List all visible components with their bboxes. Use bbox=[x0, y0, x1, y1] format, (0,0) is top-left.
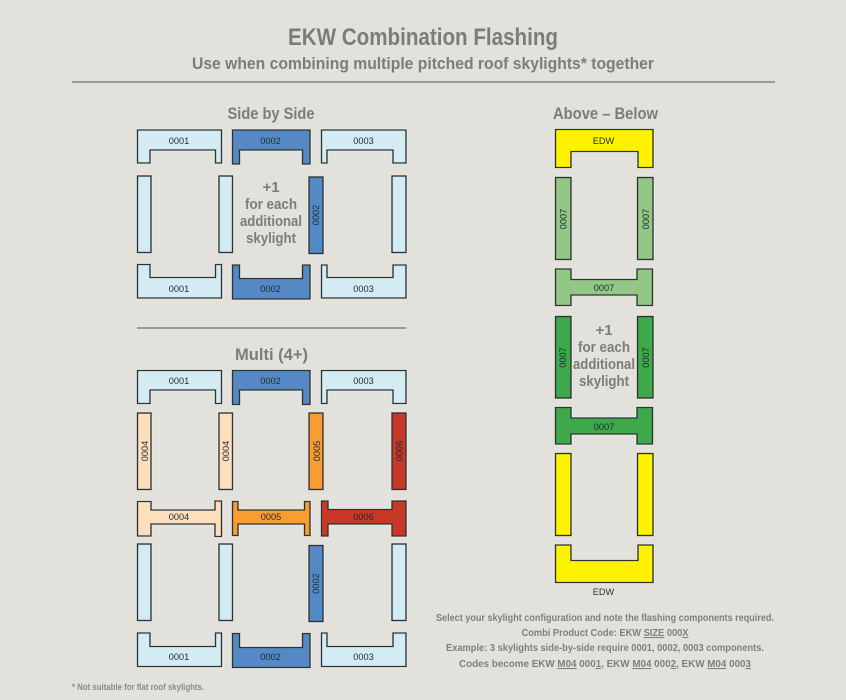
piece: 0003 top: 0003 bbox=[353, 136, 374, 146]
piece: right side 0007: 0007 bbox=[641, 209, 651, 229]
piece: left side 0007 dark bbox=[556, 316, 571, 398]
piece: 0002 bottom bbox=[232, 634, 310, 668]
piece: 0005 mullion: 0005 bbox=[261, 512, 281, 522]
callout: plus one: for each bbox=[245, 196, 297, 213]
callout: plus one: +1 bbox=[595, 322, 613, 339]
text block: instructions: Example: 3 skylights side-by-side require 0001, 0002, 0003 components. bbox=[446, 642, 764, 654]
piece: 0007 light mullion: 0007 bbox=[594, 283, 614, 293]
piece: 0001 top bbox=[138, 130, 222, 163]
piece: side 0002 lower bbox=[309, 546, 323, 622]
piece: side 0002 lower: 0002 bbox=[311, 573, 321, 594]
text block: instructions: Codes become EKW M04 0001, EKW M04 0002, EKW M04 0003 bbox=[459, 658, 751, 670]
callout: plus one: additional bbox=[573, 356, 635, 373]
piece: 0002 top bbox=[232, 370, 310, 404]
callout: plus one: additional bbox=[240, 213, 302, 230]
piece: left side 0007 dark: 0007 bbox=[558, 347, 568, 368]
piece: side 0002 bbox=[309, 177, 323, 254]
piece: 0004 mullion: 0004 bbox=[169, 512, 189, 522]
callout: plus one bbox=[240, 179, 302, 247]
piece: 0003 bottom: 0003 bbox=[353, 284, 374, 294]
piece: left side 0007: 0007 bbox=[558, 209, 568, 229]
piece: 0001 bottom: 0001 bbox=[169, 652, 189, 662]
piece: left side lower bbox=[138, 544, 151, 620]
callout: plus one bbox=[573, 322, 635, 390]
piece: right side 0001 bbox=[219, 176, 232, 252]
piece: 0006 mullion: 0006 bbox=[353, 512, 374, 522]
piece: 0003 bottom bbox=[322, 265, 406, 298]
piece: 0002 bottom: 0002 bbox=[260, 652, 281, 662]
piece: 0001 bottom: 0001 bbox=[169, 284, 189, 294]
piece: left side yellow bbox=[556, 454, 571, 536]
label: EDW bottom: EDW bbox=[593, 587, 615, 597]
piece: 0007 dark mullion: 0007 bbox=[594, 422, 614, 432]
piece: side 0005 bbox=[309, 413, 323, 490]
piece: EDW top bbox=[556, 130, 653, 168]
piece: right side 0004: 0004 bbox=[221, 441, 231, 461]
piece: 0001 bottom bbox=[138, 264, 222, 298]
piece: right side 0007 bbox=[638, 178, 653, 260]
piece: 0003 top: 0003 bbox=[353, 376, 374, 386]
piece: 0007 light mullion bbox=[556, 269, 652, 306]
piece: 0003 bottom bbox=[322, 633, 406, 666]
heading: multi: Multi (4+) bbox=[235, 345, 308, 364]
callout: plus one: skylight bbox=[246, 230, 296, 247]
piece: 0006 mullion bbox=[322, 501, 406, 536]
text block: instructions: Combi Product Code: EKW SIZE 000X bbox=[522, 627, 688, 639]
title: EKW Combination Flashing bbox=[288, 24, 558, 51]
callout: plus one: +1 bbox=[262, 179, 280, 196]
piece: right side 0003 lower bbox=[392, 544, 406, 620]
piece: 0003 top bbox=[322, 370, 406, 404]
piece: right side lower bbox=[219, 544, 232, 620]
piece: 0002 bottom bbox=[232, 265, 310, 299]
piece: 0003 bottom: 0003 bbox=[353, 652, 374, 662]
text block: instructions bbox=[436, 612, 774, 670]
subtitle: Use when combining multiple pitched roof skylights* together bbox=[192, 54, 654, 73]
piece: right side 0007 dark: 0007 bbox=[641, 347, 651, 368]
piece: side 0006 bbox=[392, 413, 406, 490]
piece: 0007 dark mullion bbox=[556, 408, 652, 444]
piece: right side 0004 bbox=[219, 413, 232, 490]
heading: side by side: Side by Side bbox=[228, 104, 314, 123]
piece: 0002 top bbox=[232, 130, 310, 164]
piece: 0005 mullion bbox=[232, 502, 310, 536]
piece: right side 0003 bbox=[392, 176, 406, 252]
piece: side 0002: 0002 bbox=[311, 205, 321, 225]
callout: plus one: skylight bbox=[579, 373, 629, 390]
piece: left side 0004 bbox=[138, 413, 151, 490]
heading: above below: Above – Below bbox=[553, 104, 659, 123]
piece: left side 0004: 0004 bbox=[140, 441, 150, 461]
piece: 0001 top bbox=[138, 370, 222, 404]
piece: left side 0007 bbox=[556, 178, 571, 260]
piece: 0001 bottom bbox=[138, 633, 222, 666]
piece: 0001 top: 0001 bbox=[169, 136, 189, 146]
piece: 0002 bottom: 0002 bbox=[260, 284, 281, 294]
panel: multi bbox=[138, 345, 406, 668]
piece: side 0006: 0006 bbox=[394, 441, 404, 461]
text block: instructions: Select your skylight configuration and note the flashing components required. bbox=[436, 612, 774, 624]
piece: EDW top: EDW bbox=[593, 136, 615, 146]
piece: EDW bottom bbox=[556, 545, 653, 582]
callout: plus one: for each bbox=[578, 339, 630, 356]
piece: 0002 top: 0002 bbox=[260, 136, 281, 146]
piece: right side yellow bbox=[638, 454, 653, 536]
footnote: * Not suitable for flat roof skylights. bbox=[72, 682, 204, 692]
panel: side by side bbox=[138, 104, 406, 299]
piece: 0001 top: 0001 bbox=[169, 376, 189, 386]
piece: 0003 top bbox=[322, 130, 406, 163]
piece: right side 0007 dark bbox=[638, 316, 653, 398]
piece: left side 0001 bbox=[138, 176, 151, 252]
piece: 0002 top: 0002 bbox=[260, 376, 281, 386]
panel: above below bbox=[553, 104, 659, 597]
piece: 0004 mullion bbox=[138, 501, 222, 536]
piece: side 0005: 0005 bbox=[312, 441, 322, 461]
